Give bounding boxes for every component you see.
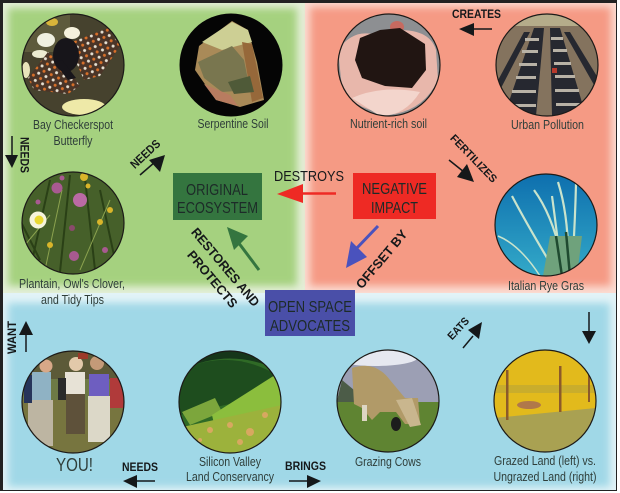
arrow: creates xyxy=(452,7,501,36)
photo: serpentine soil xyxy=(180,14,282,116)
captions: Bay Checkerspot xyxy=(33,118,113,132)
photo: silicon valley land conservancy hills xyxy=(178,350,282,455)
panel: open space (blue) xyxy=(3,293,616,490)
arrow: brings xyxy=(285,459,326,488)
captions: Urban Pollution xyxy=(511,118,584,132)
box: original ecosystem xyxy=(173,173,262,220)
box: original ecosystem: ORIGINAL xyxy=(186,182,248,199)
arrow: needs (down, left) xyxy=(5,136,32,173)
captions: Butterfly xyxy=(54,134,93,148)
photo: urban pollution traffic xyxy=(496,14,598,116)
arrow: want: WANT xyxy=(5,320,19,354)
captions: Grazed Land (left) vs. xyxy=(494,454,596,468)
photo: hikers (you) xyxy=(22,351,124,453)
arrow: brings: BRINGS xyxy=(285,459,326,473)
captions: Nutrient-rich soil xyxy=(350,117,427,131)
arrow: creates: CREATES xyxy=(452,7,501,21)
arrow: needs (diagonal to ecosystem): NEEDS xyxy=(127,137,163,171)
arrow: offset by (blue): OFFSET BY xyxy=(353,226,411,292)
arrow: needs (down, left): NEEDS xyxy=(18,137,32,173)
arrow: needs (bottom) xyxy=(122,460,158,488)
arrow: restores and protects (green): PROTECTS xyxy=(184,247,241,311)
panel: original ecosystem (green) xyxy=(3,3,306,293)
captions: Ungrazed Land (right) xyxy=(494,470,596,484)
captions: and Tidy Tips xyxy=(41,293,104,307)
photo: grazed vs ungrazed land xyxy=(494,350,596,454)
captions: Plantain, Owl's Clover, xyxy=(19,277,125,291)
box: negative impact: IMPACT xyxy=(371,200,418,217)
box: open space advocates: OPEN SPACE xyxy=(268,299,352,316)
arrow: restores and protects (green): RESTORES AND xyxy=(188,225,263,309)
arrow: eats xyxy=(446,315,482,348)
captions: Serpentine Soil xyxy=(198,117,268,131)
photo: plantain, owl's clover, tidy tips xyxy=(20,170,126,276)
photo: grazing cow xyxy=(333,349,440,454)
box: open space advocates xyxy=(265,290,355,336)
box: negative impact: NEGATIVE xyxy=(362,181,427,198)
arrow: fertilizes: FERTILIZES xyxy=(447,132,499,185)
box: original ecosystem: ECOSYSTEM xyxy=(177,200,258,217)
arrow: needs (bottom): NEEDS xyxy=(122,460,158,474)
captions: Silicon Valley xyxy=(199,455,262,469)
arrow: destroys (red): DESTROYS xyxy=(274,168,344,185)
panel: negative impact (salmon) xyxy=(305,3,616,293)
box: negative impact xyxy=(353,173,436,219)
arrow: want xyxy=(5,320,33,354)
arrow: eats: EATS xyxy=(446,315,472,343)
captions: Italian Rye Gras xyxy=(508,279,584,293)
captions: Land Conservancy xyxy=(186,470,275,484)
box: open space advocates: ADVOCATES xyxy=(270,318,350,335)
captions xyxy=(19,117,596,484)
arrow: destroys (red) xyxy=(274,168,344,203)
photo: nutrient-rich soil xyxy=(337,13,441,117)
arrow: down to grazed land xyxy=(582,312,596,344)
captions: Grazing Cows xyxy=(355,455,421,469)
photo: bay checkerspot butterfly xyxy=(20,12,126,118)
captions: YOU! xyxy=(56,455,93,475)
photo: italian rye grass xyxy=(495,174,597,276)
